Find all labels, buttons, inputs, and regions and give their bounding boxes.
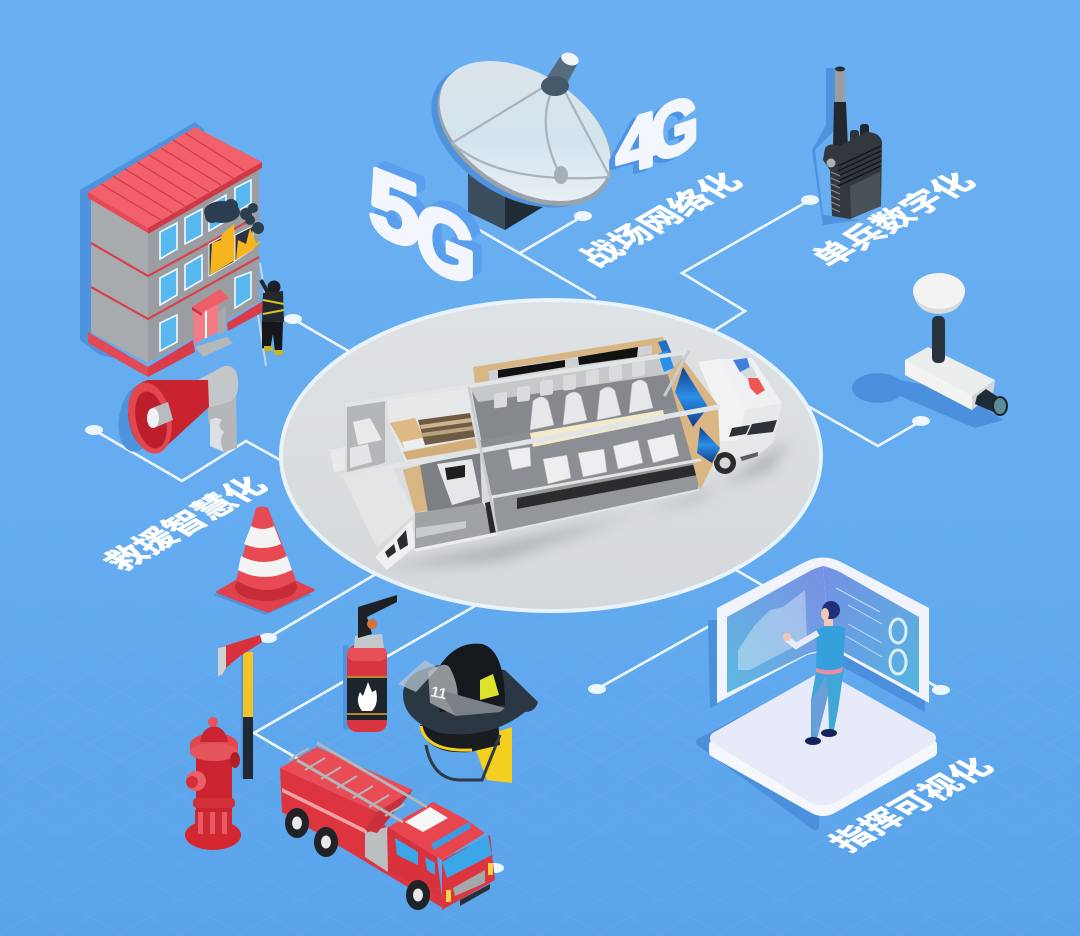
5G lettering: 5	[374, 143, 425, 267]
front bay floor	[493, 460, 700, 533]
cab	[698, 358, 782, 474]
struts	[452, 85, 610, 178]
5G lettering	[369, 141, 484, 307]
illustration: megaphone	[113, 366, 238, 458]
frame rails	[342, 352, 718, 550]
grill	[453, 870, 485, 896]
label: smart rescue: 救援智慧化	[96, 472, 276, 576]
lower shell	[420, 720, 500, 752]
cab roof	[388, 802, 485, 860]
person	[783, 601, 845, 745]
smoke	[204, 199, 264, 234]
4G lettering: G	[644, 83, 692, 184]
beacon	[431, 822, 471, 850]
ladder	[289, 743, 427, 822]
label: individual soldier digitalisation: 单兵数字化	[804, 168, 984, 272]
body	[823, 132, 882, 219]
handle	[208, 397, 237, 452]
right wall	[148, 168, 259, 363]
illustration: surveillance camera	[852, 273, 1007, 428]
dish bowl	[415, 32, 635, 230]
illustration: fire extinguisher	[343, 595, 397, 732]
screen left panel	[727, 566, 830, 693]
illustration: burning building	[80, 122, 284, 377]
illustration: fire hydrant	[185, 717, 241, 850]
cab front	[442, 835, 495, 910]
illustration: traffic cone	[214, 506, 314, 615]
platform side	[714, 684, 932, 811]
illustration: firefighter helmet: 11	[429, 683, 448, 703]
illustration: fire engine	[280, 743, 495, 910]
red cone	[128, 380, 209, 452]
cab side	[388, 827, 442, 898]
text lines	[836, 588, 882, 657]
camera shadow	[852, 373, 1003, 428]
base band	[88, 301, 263, 377]
tweeter	[152, 402, 173, 428]
ring gauges	[890, 619, 906, 674]
label: battlefield networking: 战场网络化	[571, 168, 751, 272]
brim	[403, 665, 538, 734]
dish rim	[412, 32, 638, 236]
roof lights	[733, 358, 765, 395]
back row chairs	[494, 360, 645, 409]
ladder	[258, 263, 266, 366]
central ellipse platform	[281, 300, 821, 611]
5G lettering: G	[421, 179, 480, 304]
rear cylinder	[194, 366, 238, 408]
grey pump section	[365, 827, 388, 872]
5G lettering: 5	[369, 147, 420, 271]
building shadow	[80, 122, 205, 360]
wood end wall and screen	[658, 350, 720, 490]
fire	[209, 224, 262, 276]
rear storage block	[365, 790, 413, 833]
dome	[432, 644, 505, 712]
area chart	[738, 590, 807, 670]
pole	[932, 316, 945, 363]
neck flap	[472, 727, 512, 783]
dish pedestal	[468, 170, 543, 230]
rear body side	[280, 768, 443, 908]
illustration: fire axe	[218, 635, 262, 779]
screen right panel	[823, 566, 919, 693]
platform top	[716, 680, 930, 799]
screen frame	[717, 558, 929, 703]
illustration: walkie-talkie	[812, 66, 882, 225]
boarding stairs	[375, 520, 415, 570]
roof	[88, 127, 262, 234]
wheels	[285, 808, 430, 910]
knobs	[850, 130, 859, 147]
5G lettering: G	[416, 182, 475, 307]
firefighter	[261, 280, 284, 355]
rear body top	[280, 747, 413, 812]
connector lines	[85, 195, 950, 873]
left outer shell	[343, 467, 415, 548]
platform shadow	[700, 682, 815, 826]
front shield with number	[428, 665, 458, 716]
near chairs	[508, 434, 679, 484]
4G lettering: 4	[616, 95, 658, 192]
illustration: satellite dish	[406, 32, 638, 237]
camera lens	[975, 389, 1007, 415]
floor stripes	[91, 222, 259, 319]
vehicle ground shadow	[375, 440, 790, 570]
label: command visualisation: 指挥可视化	[822, 753, 1002, 857]
conference table	[530, 410, 665, 447]
windows	[160, 180, 251, 351]
5G lettering: 5	[378, 141, 429, 265]
5G lettering: G	[425, 176, 484, 301]
camera housing	[905, 347, 995, 410]
4G lettering	[610, 79, 698, 196]
illustration: firefighter helmet	[398, 644, 538, 783]
galley room	[387, 388, 497, 550]
meeting room floor	[472, 357, 702, 497]
globe	[913, 273, 965, 314]
illustration: operator at visual display	[700, 558, 932, 826]
dish shadow	[406, 35, 630, 237]
large chairs	[530, 380, 653, 430]
left wall	[91, 198, 148, 363]
door and awning	[192, 289, 233, 357]
antenna	[835, 68, 845, 106]
screen shadow	[708, 620, 717, 708]
rear wall with windows	[473, 337, 672, 384]
command vehicle cutaway	[330, 337, 790, 570]
4G lettering: 4	[610, 99, 652, 196]
grille	[838, 146, 881, 186]
windows	[395, 835, 492, 878]
chin strap	[426, 735, 500, 780]
cone body	[236, 506, 296, 590]
black wall strip	[517, 463, 703, 509]
feed horn	[541, 50, 581, 96]
4G lettering: G	[650, 79, 698, 180]
white roof panel	[405, 807, 448, 832]
end room	[330, 400, 385, 472]
